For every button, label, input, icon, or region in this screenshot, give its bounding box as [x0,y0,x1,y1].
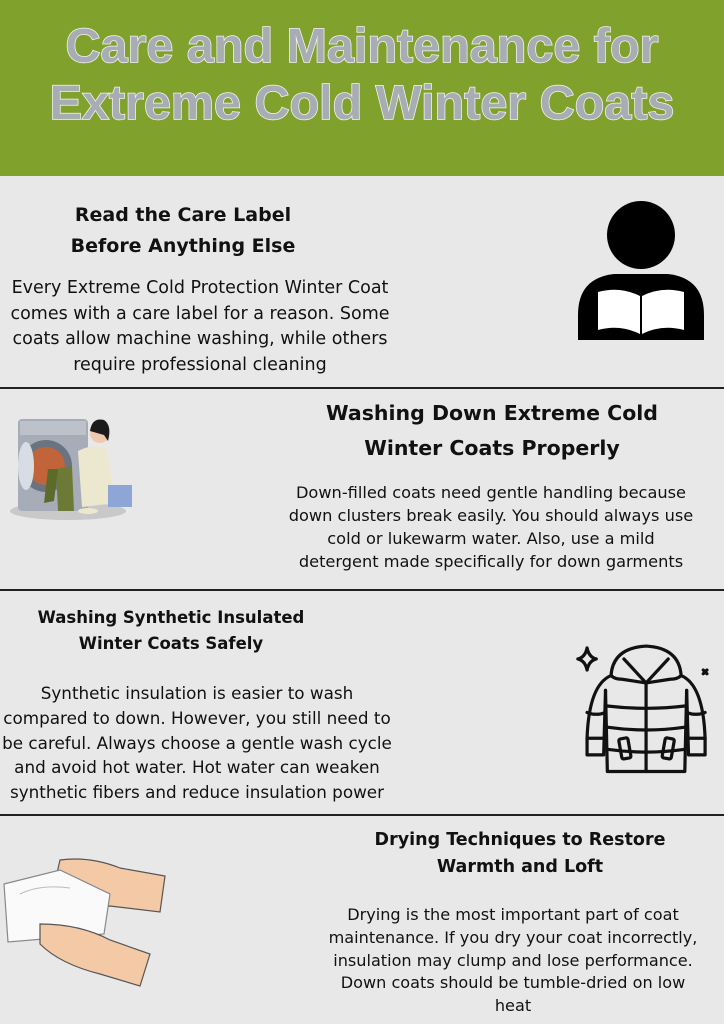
text 1: Every Extreme Cold Protection Winter Coat [12,278,388,298]
text 2: cold or lukewarm water. Also, use a mild [327,529,655,548]
text 3 [2,683,392,802]
illustration: woman at washing machine [10,419,132,520]
heading 3: Washing Synthetic Insulated [38,608,304,627]
heading 4: Warmth and Loft [437,857,603,877]
text 1: comes with a care label for a reason. Some [10,304,390,324]
text 1 [10,278,390,374]
heading 1: Before Anything Else [71,235,295,257]
text 2: Down-filled coats need gentle handling because [296,483,686,502]
heading 4 [375,830,665,877]
section 1: read the care label [10,201,704,374]
text 2: down clusters break easily. You should always use [289,506,693,525]
text 4: Drying is the most important part of coat [347,905,679,924]
text 2 [289,483,693,571]
title [50,19,674,130]
heading 2: Winter Coats Properly [364,436,620,460]
title: Care and Maintenance for [66,19,658,73]
text 3: Synthetic insulation is easier to wash [41,683,353,703]
heading 2: Washing Down Extreme Cold [326,401,658,425]
heading 2 [326,401,658,460]
heading 1: Read the Care Label [75,204,291,226]
heading 3 [38,608,304,653]
text 1: coats allow machine washing, while others [12,329,388,349]
title: Extreme Cold Winter Coats [50,76,674,130]
heading 3: Winter Coats Safely [79,634,263,653]
text 3: compared to down. However, you still need to [3,708,391,728]
text 4: heat [495,996,531,1015]
text 2: detergent made specifically for down garments [299,552,683,571]
section 3: synthetic coats [2,608,709,802]
icon: puffer jacket [576,644,709,774]
text 4: maintenance. If you dry your coat incorrectly, [329,928,697,947]
heading 4: Drying Techniques to Restore [375,830,665,850]
illustration: hands with towel [3,858,166,987]
text 1: require professional cleaning [73,354,327,374]
heading 1 [71,204,295,257]
icon: person reading [578,201,704,340]
text 4: Down coats should be tumble-dried on low [341,973,685,992]
section 4: drying [3,830,697,1015]
text 3: synthetic fibers and reduce insulation power [10,782,384,802]
header banner [0,0,724,176]
text 3: and avoid hot water. Hot water can weaken [14,757,380,777]
section 2: washing down [10,401,693,571]
text 4 [329,905,697,1015]
text 3: be careful. Always choose a gentle wash cycle [2,733,392,753]
text 4: insulation may clump and lose performance. [333,951,693,970]
